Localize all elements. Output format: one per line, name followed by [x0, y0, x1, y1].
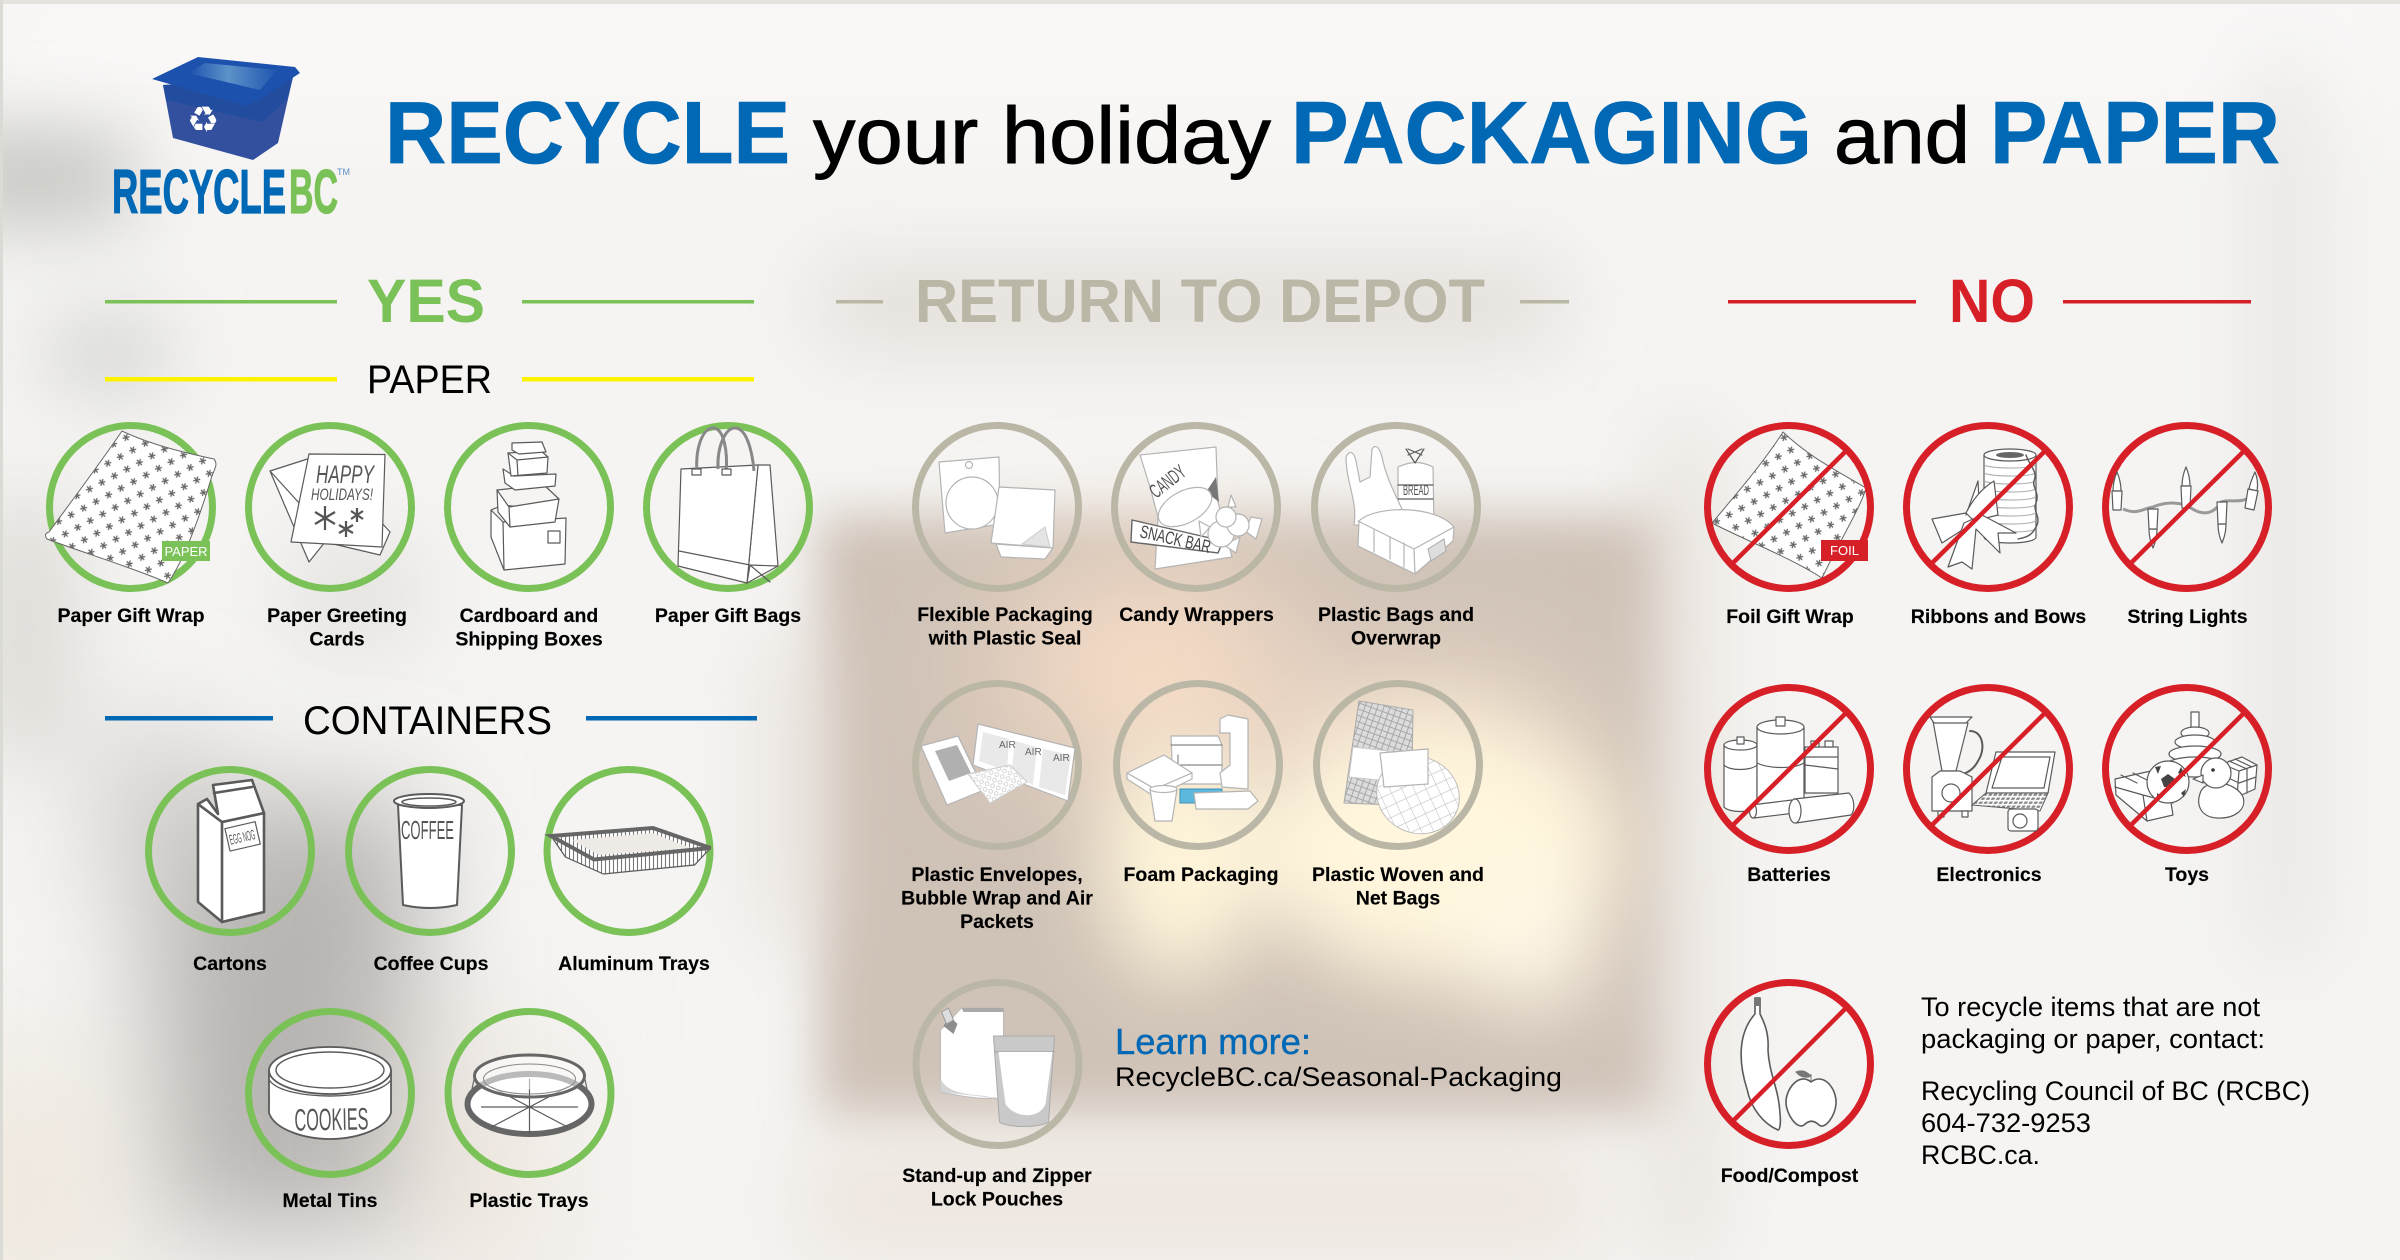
item: foam packaging	[1116, 684, 1280, 886]
item: string lights	[2106, 426, 2268, 628]
icon: candy and snack bar: CANDY	[1146, 461, 1191, 503]
label: Aluminum Trays	[558, 953, 710, 975]
icon: foil tray	[547, 770, 710, 932]
item: stand-up pouches	[902, 982, 1092, 1210]
label: Shipping Boxes	[455, 628, 603, 650]
item: electronics	[1906, 688, 2070, 886]
item: paper greeting cards	[248, 426, 412, 650]
label: Paper Gift Wrap	[57, 605, 205, 627]
heading: RETURN TO DEPOT: RETURN TO DEPOT	[915, 267, 1485, 335]
icon: bags and overwrap: BREAD	[1403, 482, 1429, 499]
icon: greeting card and envelope: HOLIDAYS!	[311, 485, 373, 504]
icon: coffee cup: COFFEE	[401, 815, 454, 845]
icon: gift bag	[646, 426, 810, 588]
item: cartons	[148, 770, 312, 975]
item: plastic bags	[1314, 426, 1478, 650]
icon: blue recycling bin: ♻	[187, 100, 219, 141]
logo: Recycle BC: TM	[337, 167, 350, 177]
callout: learn more: Learn more:	[1115, 1021, 1311, 1062]
label: Candy Wrappers	[1119, 604, 1274, 626]
icon: foam containers	[1116, 684, 1280, 846]
icon: envelopes and bubble wrap: AIR	[999, 740, 1016, 751]
label: Coffee Cups	[374, 953, 489, 975]
panel: return to depot column	[836, 267, 1569, 1210]
icon: bags and overwrap	[1314, 426, 1478, 588]
icon: greeting card and envelope: HAPPY	[316, 461, 376, 489]
item: food and compost	[1708, 982, 1870, 1187]
label: with Plastic Seal	[928, 628, 1081, 650]
icon: milk carton	[148, 770, 312, 932]
label: Bubble Wrap and Air	[901, 888, 1093, 910]
title	[385, 83, 2280, 182]
icon: envelopes and bubble wrap: AIR	[1025, 747, 1042, 758]
icon: banana and apple crossed out	[1708, 982, 1870, 1146]
icon: string lights crossed out	[2106, 426, 2268, 588]
icon: foil wrap crossed out	[1708, 426, 1870, 588]
heading: NO: NO	[1949, 267, 2035, 335]
icon: patterned paper sheet: PAPER	[164, 544, 208, 559]
label: Electronics	[1936, 864, 2042, 886]
title: and	[1834, 91, 1970, 180]
item: plastic trays	[448, 1012, 611, 1212]
label: Foam Packaging	[1124, 864, 1278, 886]
item: aluminum trays	[547, 770, 710, 975]
label: Paper Greeting	[267, 605, 407, 627]
label: Lock Pouches	[931, 1188, 1063, 1210]
text block: RCBC contact: RCBC.ca.	[1921, 1140, 2040, 1170]
wordmark: RECYCLE	[112, 158, 286, 227]
icon: patterned paper sheet	[46, 426, 216, 588]
icon: greeting card and envelope	[248, 426, 412, 588]
label: Plastic Envelopes,	[911, 864, 1083, 886]
label: Batteries	[1747, 864, 1831, 886]
heading: YES: YES	[367, 267, 485, 335]
label: Flexible Packaging	[917, 604, 1093, 626]
text block: RCBC contact	[1921, 992, 2310, 1170]
item: plastic woven bags	[1312, 684, 1484, 910]
heading: YES	[105, 267, 754, 335]
label: Packets	[960, 911, 1034, 933]
item: foil gift wrap	[1708, 426, 1870, 628]
label: Net Bags	[1356, 888, 1440, 910]
item: paper gift wrap	[46, 426, 216, 627]
label: Foil Gift Wrap	[1726, 606, 1854, 628]
icon: envelopes and bubble wrap: AIR	[1053, 753, 1070, 764]
subheading: CONTAINERS	[105, 699, 757, 743]
item: coffee cups	[348, 770, 512, 975]
item: candy wrappers	[1114, 426, 1278, 626]
subheading: PAPER: PAPER	[367, 358, 492, 402]
icon: milk carton: EGG NOG	[228, 826, 257, 848]
label: String Lights	[2127, 606, 2248, 628]
icon: sealed pouches	[916, 426, 1078, 588]
callout: learn more	[1115, 1021, 1562, 1092]
label: Metal Tins	[282, 1190, 378, 1212]
title: RECYCLE	[385, 83, 790, 182]
item: toys	[2106, 688, 2268, 886]
item: metal tins	[248, 1012, 412, 1212]
callout: learn more: RecycleBC.ca/Seasonal-Packaging	[1115, 1062, 1562, 1092]
subheading: CONTAINERS: CONTAINERS	[303, 699, 552, 743]
wordmark: BC	[289, 158, 338, 227]
title: PACKAGING	[1291, 83, 1812, 182]
icon: round plastic tray	[448, 1012, 611, 1174]
icon: coffee cup	[348, 770, 512, 932]
text block: RCBC contact: packaging or paper, contact:	[1921, 1024, 2265, 1054]
panel: yes column	[46, 267, 809, 1212]
icon: stack of boxes	[448, 426, 610, 588]
icon: blender, laptop and camera crossed out	[1906, 688, 2070, 850]
icon: cookie tin: COOKIES	[294, 1101, 369, 1138]
label: Cardboard and	[460, 605, 598, 627]
item: paper gift bags	[646, 426, 810, 627]
item: cardboard boxes	[448, 426, 610, 650]
label: Plastic Trays	[469, 1190, 589, 1212]
icon: cookie tin	[248, 1012, 412, 1174]
label: Cards	[309, 628, 365, 650]
label: Plastic Woven and	[1312, 864, 1484, 886]
heading: NO	[1728, 267, 2251, 335]
icon: envelopes and bubble wrap	[916, 684, 1078, 846]
label: Overwrap	[1351, 628, 1441, 650]
icon: woven and net bags	[1316, 684, 1480, 847]
text block: RCBC contact: To recycle items that are not	[1921, 992, 2260, 1022]
label: Stand-up and Zipper	[902, 1165, 1092, 1187]
label: Toys	[2165, 864, 2209, 886]
panel: no column	[1708, 267, 2310, 1187]
icon: ribbon spool and bow crossed out	[1906, 426, 2070, 588]
label: Paper Gift Bags	[655, 605, 801, 627]
icon: batteries crossed out	[1708, 688, 1870, 850]
icon: pouches	[916, 982, 1079, 1146]
label: Cartons	[193, 953, 267, 975]
label: Plastic Bags and	[1318, 604, 1474, 626]
icon: candy and snack bar: SNACK BAR	[1138, 521, 1213, 557]
item: flexible packaging	[916, 426, 1093, 650]
item: plastic envelopes	[901, 684, 1093, 933]
item: batteries	[1708, 688, 1870, 886]
title: your holiday	[813, 91, 1271, 180]
logo: Recycle BC	[112, 57, 350, 227]
subheading: PAPER	[105, 358, 754, 402]
text block: RCBC contact: Recycling Council of BC (RCBC)	[1921, 1076, 2310, 1106]
label: Food/Compost	[1721, 1165, 1859, 1187]
icon: toys crossed out	[2106, 688, 2268, 850]
icon: blue recycling bin	[152, 57, 300, 160]
icon: candy and snack bar	[1114, 426, 1278, 588]
icon: foil wrap crossed out: FOIL	[1830, 543, 1859, 558]
title: PAPER	[1990, 83, 2280, 182]
item: ribbons and bows	[1906, 426, 2086, 628]
text block: RCBC contact: 604-732-9253	[1921, 1108, 2091, 1138]
label: Ribbons and Bows	[1911, 606, 2086, 628]
